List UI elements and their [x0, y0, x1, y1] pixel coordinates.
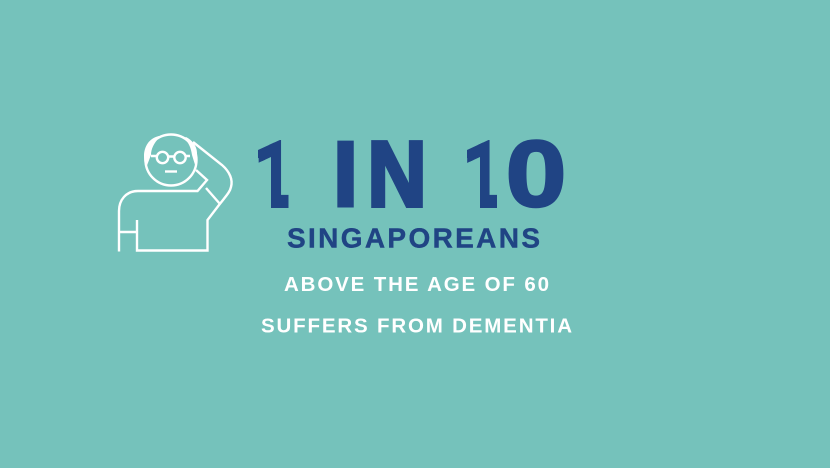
headline: 1 in 10: 0 — [506, 121, 566, 226]
infographic canvas — [118, 133, 572, 332]
subheading: Singaporeans: SINGAPOREANS — [287, 222, 540, 254]
headline: 1 in 10: 1 — [234, 122, 300, 227]
text: suffers from dementia: SUFFERS FROM DEMENTIA — [261, 314, 572, 338]
text: above the age of 60: ABOVE THE AGE OF 60 — [284, 273, 549, 296]
icon: elderly man scratching head — [119, 134, 232, 252]
headline: 1 in 10 — [258, 139, 564, 208]
headline: 1 in 10: N — [367, 122, 427, 226]
headline: 1 in 10: 1 — [443, 122, 508, 227]
headline: 1 in 10: I — [333, 122, 358, 226]
